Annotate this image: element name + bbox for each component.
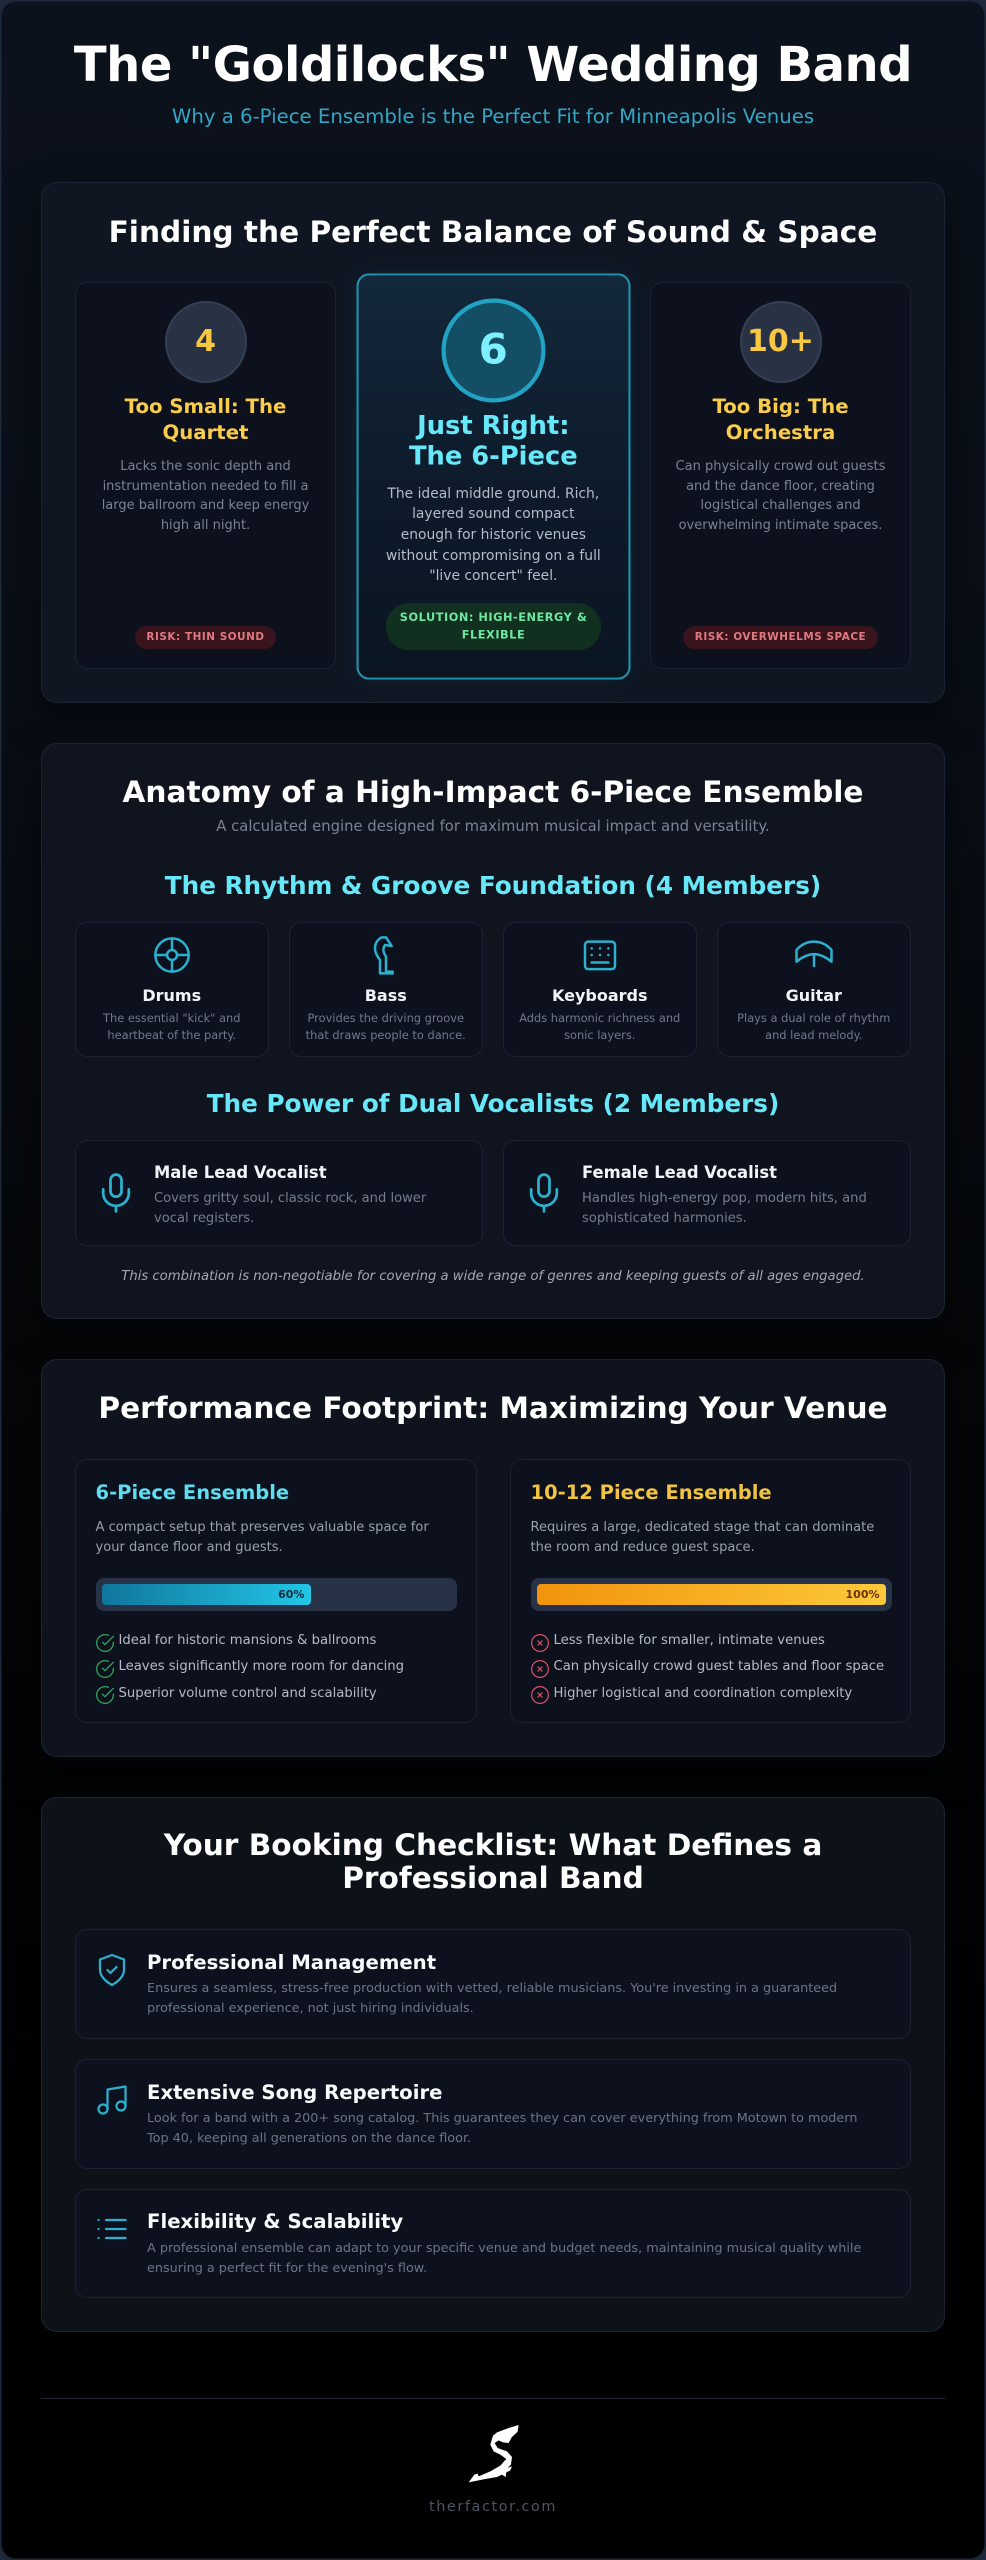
item title: Flexibility & Scalability <box>147 2210 403 2233</box>
card text: just right: enough for historic venues <box>400 527 586 543</box>
card text: quartet: instrumentation needed to fill a <box>103 479 308 494</box>
icon: list <box>97 2218 127 2240</box>
icon: music note <box>97 2085 127 2115</box>
item text: A professional ensemble can adapt to your specific venue and budget needs, maintaining musical quality while <box>147 2240 861 2256</box>
bar fill: 100%: 100% <box>846 1588 880 1601</box>
subheading: vocalists: The Power of Dual Vocalists (2 Members) <box>207 1089 779 1118</box>
note: This combination is non-negotiable for covering a wide range of genres and keeping guests of all ages engaged. <box>121 1269 865 1284</box>
card title: just right: The 6-Piece <box>409 440 577 470</box>
heading: checklist <box>164 1828 822 1895</box>
member text: drums: heartbeat of the party. <box>107 1028 236 1042</box>
icon: bass <box>374 936 394 975</box>
drawback 3: Higher logistical and coordination complexity <box>554 1686 852 1701</box>
list: benefits <box>96 1633 404 1704</box>
icon: keyboards <box>584 940 616 970</box>
card: 6-piece footprint <box>74 1459 476 1723</box>
card text: quartet: high all night. <box>161 518 250 533</box>
heading: checklist: Professional Band <box>342 1861 644 1895</box>
member text: drums <box>103 1011 240 1042</box>
bar fill: 60% <box>102 1584 310 1605</box>
bar fill: 100% <box>536 1584 886 1605</box>
member text: guitar <box>737 1011 890 1042</box>
item text: Ensures a seamless, stress-free production with vetted, reliable musicians. You're investing in a guaranteed <box>147 1981 837 1996</box>
item text: ensuring a perfect fit for the evening's flow. <box>147 2260 427 2276</box>
card text: orchestra: logistical challenges and <box>700 498 861 513</box>
heading: checklist: Your Booking Checklist: What Defines a <box>164 1828 822 1862</box>
heading: footprint: Performance Footprint: Maximizing Your Venue <box>98 1391 888 1425</box>
card title: quartet <box>124 395 286 444</box>
card title: 10-12 piece: 10-12 Piece Ensemble <box>530 1480 772 1504</box>
list: drawbacks <box>531 1633 884 1704</box>
item text <box>147 1981 837 2016</box>
card text: 10-12 piece: Requires a large, dedicated stage that can dominate <box>530 1520 874 1535</box>
icon: drums <box>154 937 190 973</box>
card text: just right: without compromising on a full <box>386 548 600 563</box>
item: song repertoire <box>74 2059 911 2168</box>
card: guitar <box>716 922 911 1057</box>
card: 10-12 piece footprint <box>510 1459 911 1723</box>
card title: 6-piece: 6-Piece Ensemble <box>96 1480 289 1504</box>
vocalist name: female: Female Lead Vocalist <box>582 1163 777 1182</box>
card text: quartet: large ballroom and keep energy <box>102 498 309 513</box>
risk pill: overwhelms space <box>683 626 878 649</box>
icon: microphone <box>102 1173 130 1213</box>
vocalist text: female: sophisticated harmonies. <box>582 1211 747 1226</box>
card text: orchestra: Can physically crowd out guests <box>676 459 885 474</box>
vocalist text: female: Handles high-energy pop, modern hits, and <box>582 1191 867 1206</box>
member text: bass: that draws people to dance. <box>306 1028 466 1042</box>
card text: 6-piece: A compact setup that preserves valuable space for <box>96 1520 429 1535</box>
subheading: rhythm: The Rhythm & Groove Foundation (4 Members) <box>165 871 821 900</box>
card title: just right <box>409 409 577 470</box>
heading: anatomy: Anatomy of a High-Impact 6-Piece Ensemble <box>122 775 863 809</box>
card: bass <box>288 922 483 1057</box>
item text: Top 40, keeping all generations on the dance floor. <box>147 2131 471 2146</box>
card: drums <box>74 922 269 1057</box>
card text: orchestra: overwhelming intimate spaces. <box>679 518 882 533</box>
item text: Look for a band with a 200+ song catalog. This guarantees they can cover everything from Motown to modern <box>147 2111 857 2126</box>
card title: orchestra: Orchestra <box>726 421 835 444</box>
badge: 4: 4 <box>195 324 216 359</box>
card title: quartet: Quartet <box>163 421 248 444</box>
member text: keyboards: sonic layers. <box>564 1028 635 1042</box>
panel: booking checklist <box>41 1797 945 2332</box>
member name: keyboards: Keyboards <box>552 986 648 1005</box>
member text: drums: The essential "kick" and <box>103 1011 240 1025</box>
card text: 6-piece <box>96 1520 429 1555</box>
member text: guitar: and lead melody. <box>765 1028 862 1042</box>
risk pill: thin sound <box>135 626 276 649</box>
card: too small quartet <box>75 282 336 669</box>
card: just right 6-piece <box>356 273 630 679</box>
heading: balance: Finding the Perfect Balance of Sound & Space <box>109 215 877 249</box>
panel: performance footprint <box>41 1359 945 1757</box>
icon: microphone <box>530 1173 558 1213</box>
solution pill: FLEXIBLE <box>461 627 525 641</box>
card text: just right: layered sound compact <box>412 506 574 522</box>
badge: 10+ <box>740 301 822 383</box>
badge: 6: 6 <box>478 325 508 374</box>
item: flexibility <box>74 2188 911 2298</box>
bar: 100 percent <box>530 1578 892 1611</box>
badge: 6 <box>441 298 545 402</box>
card: male vocalist <box>74 1140 483 1246</box>
card text: 6-piece: your dance floor and guests. <box>96 1540 283 1555</box>
risk pill: overwhelms space: RISK: OVERWHELMS SPACE <box>695 631 866 643</box>
vocalist name: male: Male Lead Vocalist <box>154 1163 327 1182</box>
footer url: therfactor.com <box>429 2499 557 2515</box>
benefit 1: Ideal for historic mansions & ballrooms <box>118 1633 376 1648</box>
card: keyboards <box>502 922 697 1057</box>
solution pill: SOLUTION: HIGH-ENERGY & <box>399 610 587 624</box>
bar fill: 60%: 60% <box>278 1588 304 1601</box>
subtitle: Why a 6-Piece Ensemble is the Perfect Fit for Minneapolis Venues <box>172 105 814 128</box>
member name: drums: Drums <box>142 986 201 1005</box>
card text: just right: "live concert" feel. <box>429 568 557 584</box>
item title: Extensive Song Repertoire <box>147 2080 443 2104</box>
item title: Professional Management <box>147 1950 436 1974</box>
panel: finding the perfect balance <box>41 182 945 703</box>
member text: bass <box>306 1011 466 1042</box>
icon: shield <box>98 1954 126 1986</box>
card text: just right: The ideal middle ground. Rich, <box>387 485 599 501</box>
badge: 4 <box>164 301 246 383</box>
drawback 1: Less flexible for smaller, intimate venues <box>554 1633 825 1648</box>
benefit 2: Leaves significantly more room for dancing <box>118 1659 404 1674</box>
card text: orchestra: and the dance floor, creating <box>686 479 875 494</box>
item: professional management <box>74 1929 911 2038</box>
item text <box>147 2111 857 2146</box>
card text: 10-12 piece: the room and reduce guest space. <box>530 1540 755 1555</box>
vocalist text: male: vocal registers. <box>154 1211 254 1226</box>
solution pill <box>386 602 601 650</box>
card text: orchestra <box>676 459 885 533</box>
member name: bass: Bass <box>365 986 407 1005</box>
member text: guitar: Plays a dual role of rhythm <box>737 1011 890 1025</box>
title: The "Goldilocks" Wedding Band <box>74 37 912 93</box>
item text <box>147 2240 861 2276</box>
card text: just right <box>386 485 600 584</box>
card text: quartet <box>102 459 309 533</box>
card: too big orchestra <box>650 282 911 669</box>
card title: quartet: Too Small: The <box>125 395 286 418</box>
icon: guitar <box>795 940 833 968</box>
card text: quartet: Lacks the sonic depth and <box>120 459 291 474</box>
card text: 10-12 piece <box>530 1520 874 1555</box>
card title: orchestra: Too Big: The <box>712 395 849 418</box>
member name: guitar: Guitar <box>786 986 842 1005</box>
risk pill: thin sound: RISK: THIN SOUND <box>146 631 265 643</box>
card title: just right: Just Right: <box>417 409 569 440</box>
card: female vocalist <box>502 1140 911 1246</box>
card title: orchestra <box>712 395 849 444</box>
bar: 60 percent <box>96 1578 456 1611</box>
member text: keyboards <box>519 1011 680 1042</box>
section subtitle: A calculated engine designed for maximum musical impact and versatility. <box>216 818 770 835</box>
member text: keyboards: Adds harmonic richness and <box>519 1011 680 1025</box>
vocalist text: male: Covers gritty soul, classic rock, and lower <box>154 1191 426 1206</box>
badge: 10+: 10+ <box>747 324 814 359</box>
member text: bass: Provides the driving groove <box>308 1011 464 1025</box>
vocalist text: female <box>582 1191 867 1226</box>
drawback 2: Can physically crowd guest tables and floor space <box>554 1659 884 1674</box>
logo <box>468 2425 519 2482</box>
vocalist text: male <box>154 1191 426 1226</box>
item text: professional experience, not just hiring individuals. <box>147 2001 474 2016</box>
benefit 3: Superior volume control and scalability <box>118 1686 377 1701</box>
panel: anatomy of the ensemble <box>41 743 945 1319</box>
